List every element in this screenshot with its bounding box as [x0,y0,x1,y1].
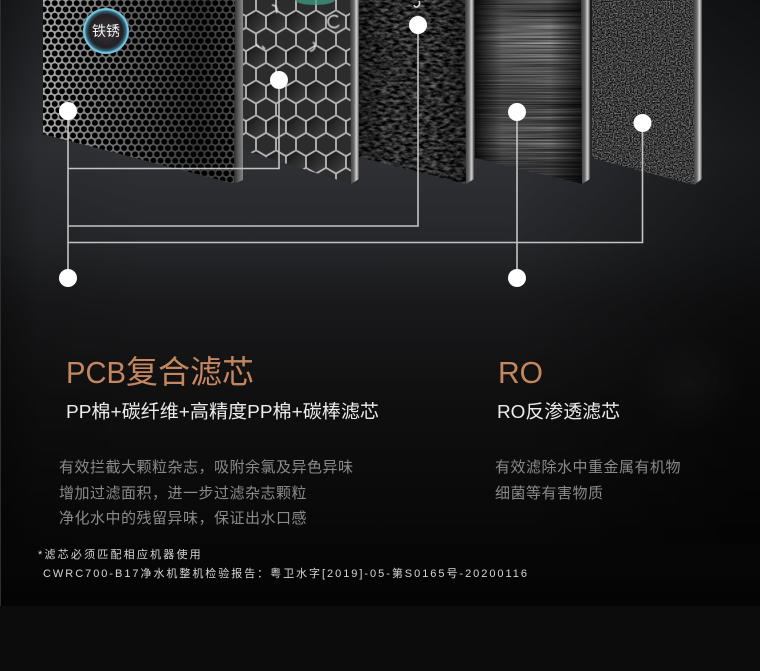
subtitle: PCB composition: PP棉+碳纤维+高精度PP棉+碳棒滤芯 [66,401,379,422]
description: RO benefits [495,459,681,502]
footnote: CWRC700-B17净水机整机检验报告：粤卫水字[2019]-05-第S0165号-20200116 [43,566,527,580]
icon: bubbles on honeycomb layer [256,5,339,51]
panel: honeycomb carbon filter layer [243,0,359,184]
footnote: *滤芯必须匹配相应机器使用 [38,547,203,561]
description: PCB benefits: 净化水中的残留异味，保证出水口感 [59,510,307,527]
heading: RO: RO [498,355,543,390]
description: RO benefits: 细菌等有害物质 [495,484,604,502]
text block: RO filter [495,355,681,502]
panel: rough stone layer [592,0,702,185]
description: RO benefits: 有效滤除水中重金属有机物 [495,459,681,476]
icon: rust particle badge [83,8,129,54]
icon: rust particle badge: 铁锈 [92,23,120,39]
panel: perforated PP filter layer [43,0,243,184]
panel: stone carbon layer [359,0,474,185]
panel: brushed metal RO layer [475,0,590,185]
text block: PCB composite filter [59,354,379,527]
icon: bubble on stone layer [414,1,420,7]
description: PCB benefits [59,458,354,527]
connector lines [68,25,642,278]
subtitle: RO membrane: RO反渗透滤芯 [497,401,620,422]
node markers [59,16,652,287]
icon: green glow at top of honeycomb layer [295,0,335,5]
footnote [38,547,527,580]
heading: PCB: PCB复合滤芯 [66,354,254,390]
description: PCB benefits: 增加过滤面积，进一步过滤杂志颗粒 [59,485,307,502]
description: PCB benefits: 有效拦截大颗粒杂志，吸附余氯及异色异味 [59,458,354,476]
